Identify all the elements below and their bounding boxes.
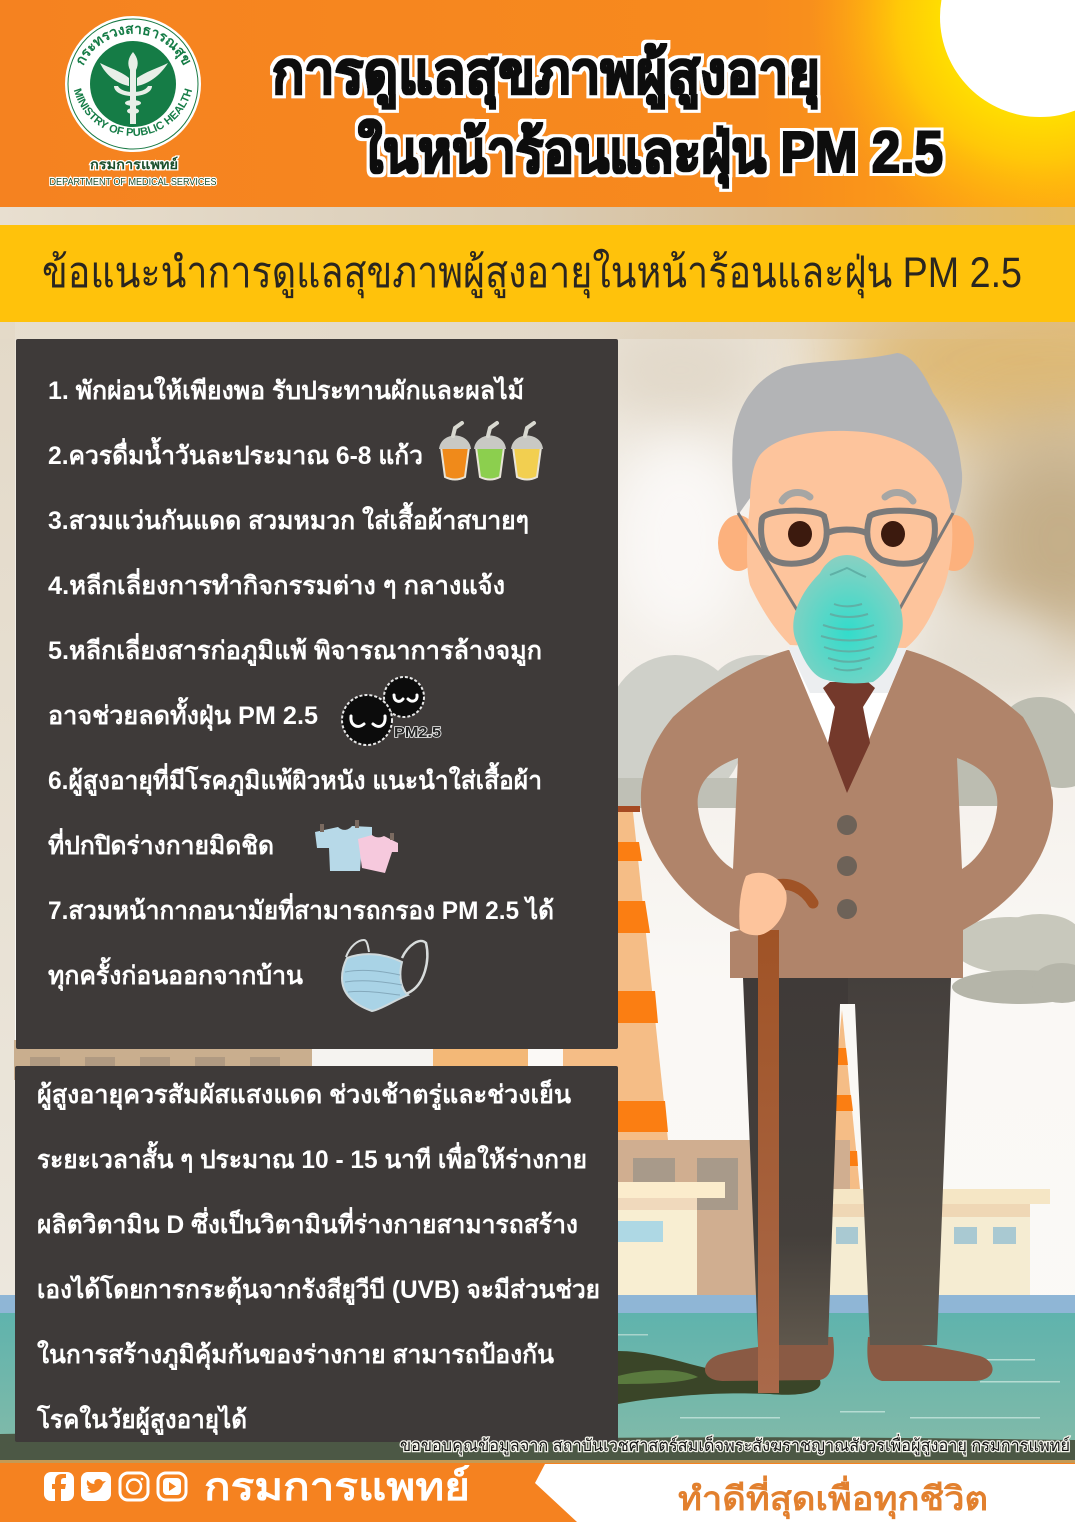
footer white ribbon: [535, 1464, 1075, 1522]
icon: youtube: [158, 1473, 186, 1500]
icon: three drink cups: [439, 423, 543, 480]
trousers: [743, 978, 951, 1345]
panel: advice list: [16, 339, 618, 1049]
icon: pm2.5 dust particles: [342, 677, 441, 745]
face: [747, 431, 952, 650]
paragraph text: เองได้โดยการกระตุ้นจากรังสียูวีบี (UVB) จะมีส่วนช่วย: [37, 1274, 600, 1306]
list text: 3.สวมแว่นกันแดด สวมหมวก ใส่เสื้อผ้าสบายๆ: [48, 501, 529, 535]
department name english: DEPARTMENT OF MEDICAL SERVICES: [50, 177, 217, 188]
paragraph text: [36, 1079, 600, 1436]
factory chimney small: [824, 1010, 860, 1189]
jacket: [641, 650, 1053, 978]
polluted stream highlight: [618, 1370, 698, 1384]
icon: surgical mask: [342, 940, 427, 1011]
list text: 1. พักผ่อนให้เพียงพอ รับประทานผักและผลไม้: [48, 375, 524, 405]
subtitle band: [0, 225, 1075, 322]
list text: ทุกครั้งก่อนออกจากบ้าน: [48, 956, 303, 992]
main title: ในหน้าร้อนและฝุ่น PM 2.5: [358, 118, 943, 189]
eyes: [788, 521, 905, 547]
header: [0, 0, 1075, 207]
collar: [788, 647, 907, 790]
logo: ministry of public health: กระทรวงสาธารณสุข: [78, 24, 190, 66]
polluted stream: [618, 1351, 820, 1404]
eyebrows: [782, 492, 913, 501]
footer: [0, 1460, 1075, 1522]
social icons: [44, 1472, 186, 1501]
paragraph text: ผลิตวิตามิน D ซึ่งเป็นวิตามินที่ร่างกายสามารถสร้าง: [37, 1207, 578, 1239]
sun: [940, 0, 1075, 117]
paragraph text: โรคในวัยผู้สูงอายุได้: [36, 1404, 247, 1436]
hair: [732, 353, 962, 515]
department name thai: กรมการแพทย์: [90, 156, 178, 172]
buttons: [837, 815, 857, 919]
icon: pm2.5 dust particles: PM2.5: [394, 724, 441, 741]
ears: [718, 515, 974, 571]
list text: 2.ควรดื่มน้ำวันละประมาณ 6-8 แก้ว: [48, 436, 423, 470]
list text: อาจช่วยลดทั้งฝุ่น PM 2.5: [48, 696, 318, 732]
hazy strip: [0, 207, 1075, 225]
paragraph text: ระยะเวลาสั้น ๆ ประมาณ 10 - 15 นาที เพื่อให้ร่างกาย: [37, 1140, 587, 1174]
factory strip behind panels: [14, 1040, 528, 1080]
grey cloud left: [605, 655, 810, 808]
factory building left: [618, 1140, 850, 1295]
factory chimney large: [440, 806, 668, 1140]
footer slogan: ทำดีที่สุดเพื่อทุกชีวิต: [678, 1475, 988, 1520]
list text: 7.สวมหน้ากากอนามัยที่สามารถกรอง PM 2.5 ได้: [48, 893, 554, 925]
shoes: [705, 1337, 993, 1381]
paragraph text: ผู้สูงอายุควรสัมผัสแสงแดด ช่วงเช้าตรู่และช่วงเย็น: [37, 1079, 571, 1111]
panel: vitamin D advice: [15, 1066, 618, 1442]
water: [0, 1295, 1075, 1443]
respirator mask: [793, 555, 903, 683]
logo: ministry of public health: [49, 16, 218, 188]
list text: [48, 375, 554, 992]
hazy strip below band: [0, 322, 1075, 339]
list text: 5.หลีกเลี่ยงสารก่อภูมิแพ้ พิจารณาการล้างจมูก: [48, 633, 542, 667]
polluted haze: [600, 270, 1075, 705]
icon: shirts: [315, 820, 398, 873]
caduceus: [100, 52, 168, 124]
icon: twitter: [81, 1472, 111, 1501]
logo: ministry of public health: MINISTRY OF PUBLIC HEALTH: [74, 88, 192, 136]
factory building right: [830, 1189, 1050, 1295]
paragraph text: ในการสร้างภูมิคุ้มกันของร่างกาย สามารถป้องกัน: [37, 1339, 554, 1371]
footer department name: กรมการแพทย์: [204, 1464, 470, 1509]
main title: การดูแลสุขภาพผู้สูงอายุ: [272, 41, 820, 110]
list text: ที่ปกปิดร่างกายมิดชิด: [48, 828, 274, 860]
tie: [823, 682, 875, 793]
grey cloud right upper: [955, 697, 1075, 806]
list text: 4.หลีกเลี่ยงการทำกิจกรรมต่าง ๆ กลางแจ้ง: [48, 568, 505, 600]
glasses: [738, 511, 953, 610]
icon: instagram: [120, 1473, 148, 1500]
left edge strip: [0, 322, 15, 1295]
main title: [272, 41, 943, 189]
hand: [739, 873, 787, 935]
illustration: elderly man: [641, 353, 1053, 1393]
shoreline: [0, 1434, 1075, 1460]
list text: 6.ผู้สูงอายุที่มีโรคภูมิแพ้ผิวหนัง แนะนำใส่เสื้อผ้า: [48, 761, 542, 797]
grey cloud right lower: [952, 914, 1075, 1004]
source credit: ขอขอบคุณข้อมูลจาก สถาบันเวชศาสตร์สมเด็จพระสังฆราชญาณสังวรเพื่อผู้สูงอายุ กรมการแพทย์: [400, 1434, 1070, 1456]
icon: facebook: [44, 1472, 74, 1501]
walking cane: [758, 884, 813, 1393]
